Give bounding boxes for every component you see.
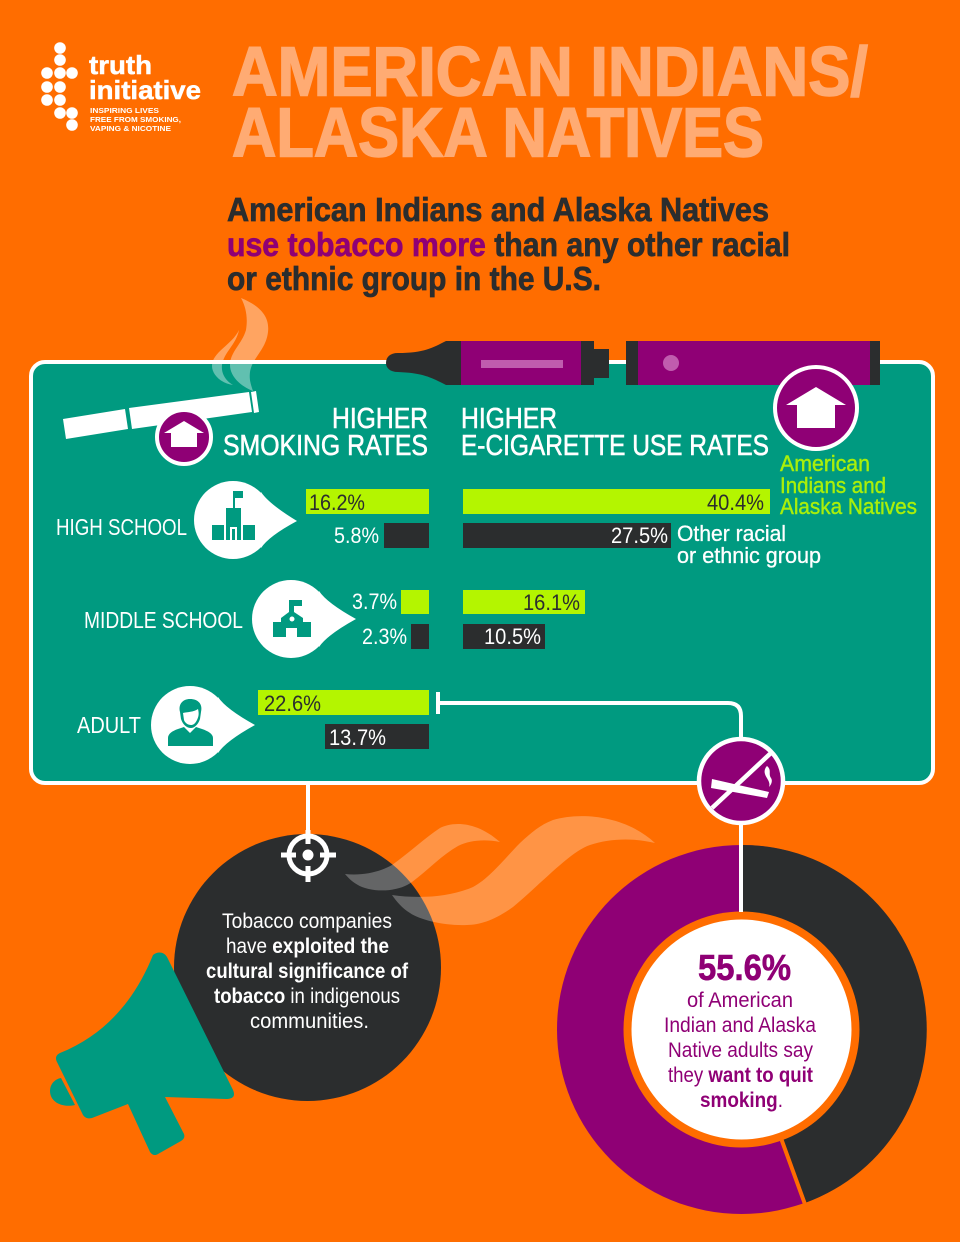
donut text: 55.6 percent want to quit: of American	[687, 989, 793, 1012]
decoration: smoke wisps	[345, 816, 655, 925]
bars: high school smoking	[306, 489, 429, 548]
arrow: connector from adult bar to donut	[438, 692, 741, 912]
logo: truth initiative: initiative	[89, 75, 201, 105]
callout: tobacco companies circle: cultural significance of	[206, 960, 409, 983]
callout: tobacco companies circle	[174, 834, 441, 1101]
bars: adult smoking: 22.6%	[264, 691, 321, 716]
row label: adult: ADULT	[77, 712, 141, 738]
donut chart	[557, 845, 927, 1214]
bars: adult smoking: 13.7%	[329, 725, 386, 750]
row label: high school: HIGH SCHOOL	[56, 514, 187, 540]
bars: high school smoking: 16.2%	[309, 490, 365, 515]
callout: tobacco companies circle: communities.	[250, 1010, 369, 1033]
heading: higher smoking rates	[223, 403, 428, 462]
bars: high school e-cigarette: 27.5%	[611, 523, 668, 548]
panel: green data panel	[31, 362, 933, 783]
bars: middle school smoking: 2.3%	[362, 624, 407, 649]
callout: tobacco companies circle: tobacco in indigenous	[214, 985, 400, 1008]
bars: middle school e-cigarette: 16.1%	[523, 590, 580, 615]
row label: middle school: MIDDLE SCHOOL	[84, 607, 243, 633]
legend: american indians and alaska natives: American	[780, 451, 870, 476]
title: ALASKA NATIVES	[232, 94, 764, 172]
icon: e-cigarette	[386, 341, 880, 385]
icon: no smoking badge	[699, 739, 783, 823]
logo: truth initiative: truth	[89, 50, 152, 80]
icon: middle school bubble	[252, 580, 356, 658]
bars: middle school e-cigarette: 10.5%	[484, 624, 541, 649]
legend: other racial or ethnic group	[677, 521, 821, 568]
donut text: 55.6 percent want to quit: Native adults say	[668, 1039, 813, 1062]
callout: tobacco companies circle: Tobacco companies	[222, 910, 392, 933]
heading: higher smoking rates: HIGHER	[332, 403, 428, 435]
icon: target	[281, 830, 336, 882]
logo: truth initiative: INSPIRING LIVES	[90, 108, 159, 115]
title: AMERICAN INDIANS/	[232, 32, 868, 110]
donut text: 55.6 percent want to quit: 55.6%	[698, 947, 791, 988]
donut text: 55.6 percent want to quit: they want to quit	[668, 1064, 813, 1087]
heading: higher smoking rates: SMOKING RATES	[223, 430, 428, 462]
bars: high school smoking: 5.8%	[334, 523, 379, 548]
subtitle: or ethnic group in the U.S.	[227, 260, 601, 297]
icon: adult bubble	[151, 686, 255, 764]
legend: american indians and alaska natives: Indians and	[780, 473, 886, 498]
icon: cigarette with smoke	[63, 298, 268, 439]
legend: other racial or ethnic group: Other racial	[677, 521, 786, 546]
connector: panel to callout	[306, 783, 310, 839]
heading: higher e-cigarette use rates: HIGHER	[461, 403, 557, 435]
legend: other racial or ethnic group: or ethnic group	[677, 543, 821, 568]
legend: american indians and alaska natives: Alaska Natives	[780, 494, 917, 519]
logo: truth initiative: FREE FROM SMOKING,	[90, 117, 181, 124]
subtitle	[227, 191, 790, 297]
donut text: 55.6 percent want to quit	[664, 947, 816, 1112]
legend: american indians and alaska natives	[775, 367, 917, 519]
title	[232, 32, 868, 172]
logo: truth initiative	[41, 42, 201, 133]
bars: middle school e-cigarette	[463, 590, 585, 649]
subtitle: use tobacco more than any other racial	[227, 226, 790, 263]
icon: small house badge	[157, 410, 211, 464]
donut text: 55.6 percent want to quit: smoking.	[700, 1089, 783, 1112]
bars: high school e-cigarette: 40.4%	[707, 490, 764, 515]
bars: adult smoking	[258, 690, 429, 750]
bars: high school e-cigarette	[463, 489, 770, 548]
bars: middle school smoking	[352, 589, 429, 649]
bars: middle school smoking: 3.7%	[352, 589, 397, 614]
donut text: 55.6 percent want to quit: Indian and Alaska	[664, 1014, 816, 1037]
callout: tobacco companies circle: have exploited the	[226, 935, 389, 958]
heading: higher e-cigarette use rates	[461, 403, 769, 462]
heading: higher e-cigarette use rates: E-CIGARETTE USE RATES	[461, 430, 769, 462]
subtitle: American Indians and Alaska Natives	[227, 191, 769, 228]
icon: high school bubble	[194, 481, 297, 559]
logo: truth initiative: VAPING & NICOTINE	[90, 126, 171, 133]
megaphone icon	[50, 953, 234, 1155]
